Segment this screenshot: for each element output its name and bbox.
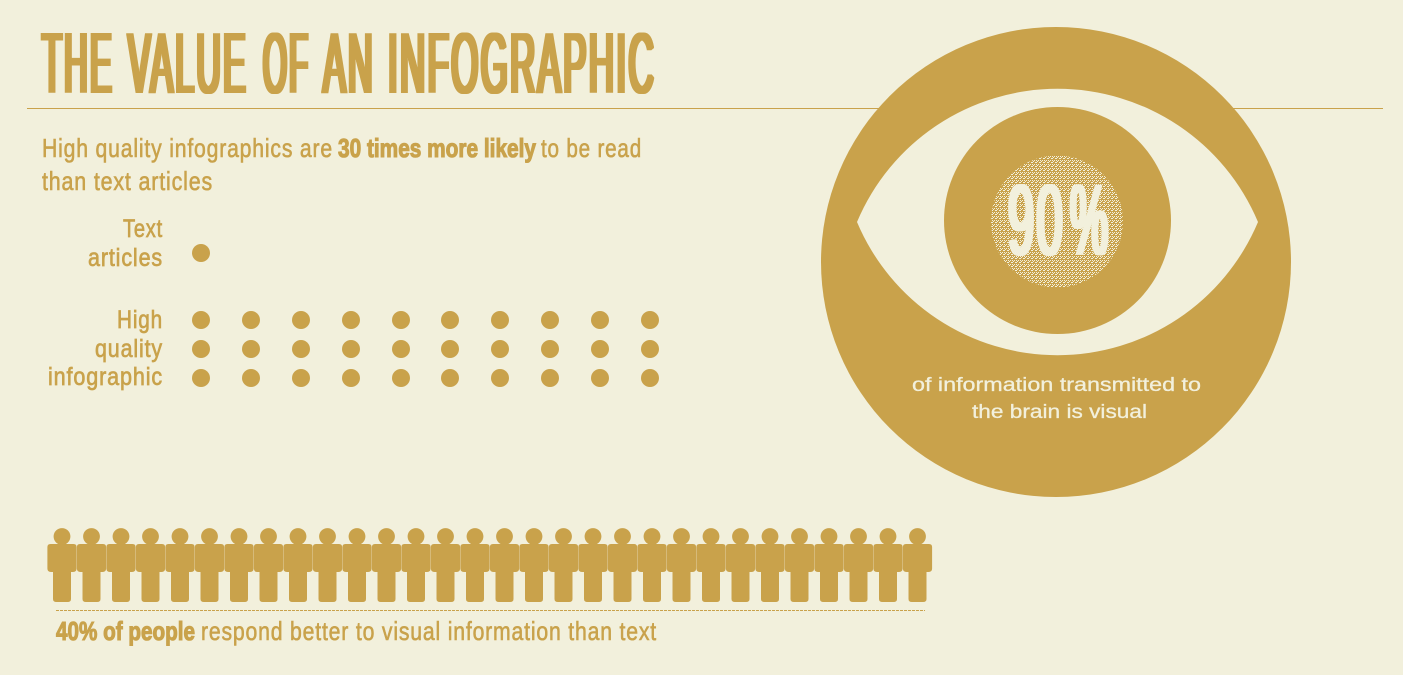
heading: 30 times more likely: High quality infographics are	[42, 133, 333, 163]
title	[42, 16, 656, 112]
caption	[912, 375, 1201, 423]
label: text articles: articles	[88, 244, 163, 272]
label: text articles: Text	[123, 215, 163, 243]
title: OF	[263, 16, 310, 112]
people row pictogram	[47, 528, 932, 602]
footer statement: 40% of people: 40% of people	[56, 616, 195, 646]
heading: 30 times more likely: than text articles	[42, 166, 213, 196]
label: high quality infographic: High	[117, 306, 163, 334]
dot: text articles	[192, 244, 210, 262]
heading: 30 times more likely	[42, 133, 642, 196]
title: VALUE	[128, 16, 248, 112]
caption: of information transmitted to	[912, 375, 1201, 396]
pupil	[991, 156, 1123, 288]
heading: 30 times more likely: to be read	[541, 133, 642, 163]
label: text articles	[88, 215, 163, 272]
label: high quality infographic	[48, 306, 163, 391]
90 percent figure: 90	[1008, 164, 1065, 276]
title: AN	[323, 16, 375, 112]
eye graphic: 90%	[821, 27, 1291, 497]
text: INFOGRAPHIC	[388, 16, 656, 112]
heading: 30 times more likely: 30 times more likely	[338, 133, 536, 163]
outer circle	[821, 27, 1291, 497]
eye graphic: 90%: %	[1070, 164, 1108, 276]
footer statement: 40% of people: respond better to visual information than text	[201, 616, 657, 646]
label: high quality infographic: quality	[95, 335, 163, 363]
dot grid: high quality infographic	[192, 311, 659, 387]
footer statement: 40% of people	[56, 616, 657, 646]
eye white	[857, 89, 1258, 355]
label: high quality infographic: infographic	[48, 363, 163, 391]
iris	[944, 107, 1171, 334]
title: THE	[42, 16, 114, 112]
caption: the brain is visual	[972, 402, 1147, 423]
